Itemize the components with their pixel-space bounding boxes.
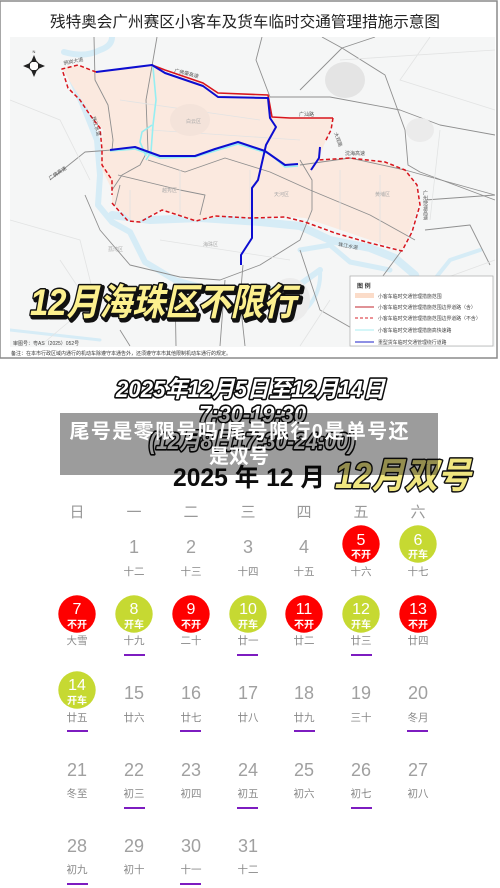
week 4: 初八: [408, 787, 429, 800]
week 5: [66, 836, 258, 885]
week 5: 初九: [66, 863, 88, 876]
badge: 14 open: 开车: [67, 694, 87, 707]
week 4: 初七: [350, 787, 372, 800]
map labels: 荔湾区: [108, 246, 123, 253]
week 1: 十二: [124, 565, 144, 578]
map labels: 海珠区: [203, 241, 218, 248]
rivers: [10, 37, 480, 340]
map labels: [47, 56, 428, 253]
badge: 8 open: 8: [130, 601, 139, 618]
legend: [350, 276, 493, 346]
map headline: no limit in Haizhu: 12月海珠区不限行: [32, 284, 302, 325]
map labels: 广汕路: [299, 111, 314, 118]
badge: 10 open: 开车: [238, 618, 258, 631]
compass icon: N: [33, 49, 36, 54]
badge: 12 open: 12: [352, 601, 370, 618]
badge: 5 closed: 5: [357, 532, 366, 549]
freight detour roads: blue: [96, 65, 320, 265]
map labels: 白云区: [186, 118, 201, 125]
week 1: 十三: [180, 565, 202, 578]
badge: 7 closed: 不开: [67, 619, 87, 631]
map area: [10, 37, 495, 347]
map title: 残特奥会广州赛区小客车及货车临时交通管理措施示意图: [50, 12, 440, 31]
badge: 10 open: 10: [239, 601, 257, 618]
badge: 8 open: [115, 595, 153, 633]
week 4: 初六: [294, 787, 314, 800]
week 1: 3: [243, 537, 253, 557]
week 4: 24: [238, 760, 258, 780]
badge: 11 closed: 11: [296, 601, 312, 618]
week 2: 廿四: [408, 635, 428, 647]
map labels: 越秀区: [162, 187, 177, 194]
map note: 备注：在本市行政区域内通行的机动车除遵守本通告外，还须遵守本市其他限制机动车通行的规定。: [11, 350, 231, 357]
date range heading: (12月8日17:30-24:00): [149, 428, 355, 454]
week 3: [58, 671, 429, 732]
week 2: 大雪: [66, 634, 88, 647]
week 1: 十五: [294, 565, 314, 578]
badge: 9 closed: [172, 595, 210, 633]
badge: 13 closed: 不开: [408, 619, 428, 631]
map labels: 黄埔区: [375, 191, 390, 198]
week 4: 冬至: [66, 787, 88, 800]
badge: 13 closed: [399, 595, 437, 633]
badge: 9 closed: 不开: [181, 619, 201, 631]
weekday header: 日: [69, 504, 85, 521]
badge: 7 closed: 7: [73, 601, 82, 618]
map labels: 珠江水道: [338, 241, 359, 251]
week 1: 2: [186, 537, 196, 557]
badge: 10 open: [229, 595, 267, 633]
legend title: 图 例: [357, 282, 371, 290]
week 3: 17: [238, 683, 258, 703]
week 1: 十四: [238, 565, 258, 578]
week 1: 4: [299, 537, 309, 557]
map labels: 天河区: [274, 191, 289, 198]
badge: 11 closed: [285, 595, 323, 633]
week 5: 28: [67, 836, 87, 856]
week 4: 初五: [238, 787, 258, 800]
compass icon: [23, 49, 45, 77]
badge: 9 closed: 9: [187, 601, 196, 618]
week 5: 十二: [238, 863, 258, 876]
week 1: [124, 525, 437, 578]
week 3: 19: [351, 683, 371, 703]
map headline: no limit in Haizhu: 12月海珠区不限行: [30, 282, 300, 323]
article title overlay: 是双号: [209, 445, 269, 468]
express roads: light cyan: [110, 67, 298, 167]
week 1: 十七: [408, 565, 428, 578]
badge: 6 open: 开车: [408, 548, 428, 561]
week 4: 27: [408, 760, 428, 780]
week 5: 十一: [180, 863, 202, 876]
week 4: 23: [181, 760, 201, 780]
map labels: 广州快速高速: [422, 189, 428, 221]
weekday header: 二: [183, 504, 199, 521]
badge: 5 closed: 不开: [351, 549, 371, 561]
week 5: 30: [181, 836, 201, 856]
map labels: 鸦岗大道: [63, 56, 84, 67]
boundary roads, excluded: red dashed: [62, 65, 420, 251]
week 2: 廿二: [294, 635, 314, 647]
badge: 5 closed: [342, 525, 380, 563]
minor roads: [10, 37, 495, 346]
legend item: cyan: 小客车临时交通管理措施高快速路: [378, 327, 451, 334]
week 2: 廿三: [350, 635, 372, 647]
map labels: 沈海高速: [345, 150, 365, 157]
badge: 14 open: [58, 671, 96, 709]
week 4: 初三: [124, 787, 144, 800]
badge: 14 open: 14: [68, 677, 86, 694]
week 2: 二十: [180, 634, 202, 647]
legend item: red solid: 小客车临时交通管理措施范围边界道路（含）: [378, 304, 476, 311]
legend item: blue: [355, 339, 447, 346]
roads: [50, 37, 495, 346]
map labels: 大观路: [332, 131, 344, 148]
week 3: 廿五: [66, 712, 88, 724]
date range heading: 7:30-19:30: [199, 401, 306, 427]
week 1: 十六: [350, 565, 372, 578]
legend item: zone: [355, 293, 442, 300]
week 4: [66, 760, 429, 809]
date range heading: [115, 376, 387, 454]
week 5: 初十: [124, 863, 144, 876]
weekday header: 五: [353, 504, 369, 521]
date range heading: 2025年12月5日至12月14日: [115, 376, 387, 402]
weekday header: [69, 504, 426, 521]
week 2: 十九: [124, 634, 145, 647]
boundary roads, included: red: [152, 65, 333, 118]
legend item: zone: 小客车临时交通管理措施范围: [378, 293, 442, 300]
badge: 13 closed: 13: [409, 601, 427, 618]
week 3: 廿八: [238, 712, 259, 724]
week 4: 22: [124, 760, 144, 780]
week 3: 三十: [350, 711, 372, 724]
week 3: 廿六: [124, 712, 144, 724]
week 3: 16: [181, 683, 201, 703]
week 2: 廿一: [238, 635, 259, 647]
map caption: 审图号：粤AS（2025）052号: [13, 340, 79, 347]
week 1: 1: [129, 537, 139, 557]
week 4: 21: [67, 760, 87, 780]
legend item: red solid: [355, 304, 476, 311]
legend item: red dashed: 小客车临时交通管理措施范围边界道路（不含）: [378, 315, 481, 322]
week 5: 29: [124, 836, 144, 856]
badge: 12 open: [342, 595, 380, 633]
weekday header: 一: [126, 504, 142, 521]
week 4: 初四: [180, 787, 202, 800]
week 3: 15: [124, 683, 144, 703]
week 3: 冬月: [408, 711, 428, 724]
badge: 11 closed: 不开: [294, 619, 314, 631]
legend item: cyan: [355, 327, 451, 334]
week 4: 26: [351, 760, 371, 780]
map labels: 广佛肇高速: [174, 67, 199, 80]
calendar: [58, 504, 437, 885]
week 4: 25: [294, 760, 314, 780]
article title overlay: 尾号是零限号吗/尾号限行0是单号还: [70, 420, 408, 443]
week 3: 廿七: [180, 712, 202, 724]
legend item: red dashed: [355, 315, 481, 322]
week 3: 18: [294, 683, 314, 703]
month heading: 2025 年 12 月: [173, 464, 325, 492]
weekday header: 六: [410, 504, 426, 521]
weekday header: 三: [240, 504, 256, 521]
badge: 7 closed: [58, 595, 96, 633]
badge: 8 open: 开车: [124, 618, 144, 631]
weekday header: 四: [296, 504, 312, 521]
week 3: 廿九: [294, 712, 315, 724]
week 2: [58, 595, 437, 656]
restricted zone fill: [62, 65, 419, 250]
badge: 6 open: 6: [414, 532, 423, 549]
even-number sticker: 12月双号: [335, 455, 474, 496]
map labels: 广佛高速: [47, 165, 68, 182]
badge: 12 open: 开车: [351, 618, 371, 631]
panel: traffic map: [0, 1, 497, 358]
week 3: 20: [408, 683, 428, 703]
badge: 6 open: [399, 525, 437, 563]
legend item: blue: 重型货车临时交通管理绕行道路: [378, 339, 447, 346]
week 5: 31: [238, 836, 258, 856]
article title overlay: [60, 413, 438, 475]
map labels: 珠江水道: [90, 116, 102, 137]
